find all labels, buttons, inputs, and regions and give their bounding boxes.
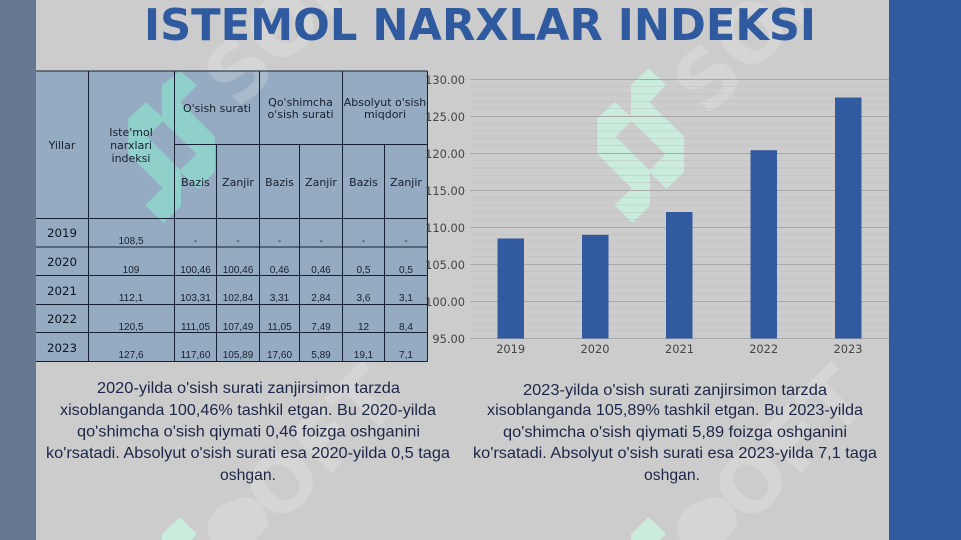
x axis labels [496, 342, 862, 356]
table row 2022: 111,05 [181, 322, 210, 333]
y axis labels: 130.00 [425, 73, 465, 87]
table row 2019: - [236, 236, 240, 247]
table row 2022 [47, 312, 413, 333]
table row 2022: 12 [358, 322, 369, 333]
table header: narxlari [110, 139, 152, 152]
table row 2022: 2022 [47, 312, 77, 326]
table row 2023: 2023 [47, 341, 77, 355]
logo: lower left [162, 517, 197, 540]
table header: Absolyut o'sish [344, 96, 426, 109]
table row 2020: 0,5 [399, 265, 413, 276]
y axis labels: 95.00 [432, 332, 465, 346]
table header: Yillar [48, 139, 76, 152]
text block: 2020 commentary: oshgan. [220, 467, 276, 484]
table header: miqdori [364, 108, 406, 121]
table row 2021: 2,84 [311, 293, 331, 304]
table row 2021: 3,6 [357, 293, 371, 304]
text block: 2020 commentary: 2020-yilda o'sish surati zanjirsimon tarzda [97, 380, 400, 397]
table row 2019: - [362, 236, 365, 247]
table row 2021: 2021 [47, 284, 77, 298]
table row 2020: 100,46 [223, 265, 254, 276]
table row 2023 [47, 341, 413, 361]
table row 2021: 3,31 [270, 293, 290, 304]
x axis labels: 2023 [834, 342, 862, 356]
watermark: lower left: OFT [226, 349, 417, 540]
y axis labels: 105.00 [425, 258, 465, 272]
table header: Zanjir [305, 176, 337, 189]
bar chart [425, 73, 889, 356]
table row 2023: 117,60 [181, 350, 211, 361]
table row 2022: 11,05 [267, 322, 292, 333]
bars [498, 98, 862, 338]
x axis labels: 2022 [749, 342, 778, 356]
y axis labels: 115.00 [425, 184, 465, 198]
text block: 2023 commentary [473, 382, 877, 484]
y axis labels [425, 73, 465, 346]
table row 2020: 109 [123, 265, 140, 276]
table row 2022: 7,49 [311, 322, 331, 333]
text block: 2023 commentary: qo'shimcha o'sish qiymati 5,89 foizga oshganini [503, 424, 847, 441]
table row 2023: 7,1 [399, 350, 413, 361]
table row 2023: 17,60 [267, 350, 292, 361]
table header: Iste'mol [109, 126, 153, 139]
watermark: lower right: OFT [695, 349, 886, 540]
table row 2019: 108,5 [118, 236, 144, 247]
table row 2020 [47, 255, 413, 276]
table background [36, 71, 428, 362]
text block: 2023 commentary: oshgan. [644, 467, 700, 484]
table row 2021: 103,31 [180, 293, 211, 304]
table header: Bazis [265, 176, 294, 189]
table row 2020: 0,5 [357, 265, 371, 276]
table row 2020: 2020 [47, 255, 77, 269]
table header: indeksi [112, 152, 150, 165]
table header: O'sish surati [183, 102, 251, 115]
table row 2019 [47, 226, 408, 247]
table row 2022: 8,4 [399, 322, 413, 333]
table row 2023: 127,6 [118, 350, 144, 361]
left side band [0, 0, 36, 540]
table row 2021: 102,84 [223, 293, 254, 304]
text block: 2023 commentary: xisoblanganda 105,89% tashkil etgan. Bu 2023-yilda [487, 402, 863, 419]
table row 2022: 107,49 [223, 322, 254, 333]
logo: lower right [631, 517, 666, 540]
text block: 2020 commentary: ko'rsatadi. Absolyut o'sish surati esa 2020-yilda 0,5 taga [46, 445, 450, 462]
table row 2023: 105,89 [223, 350, 254, 361]
table header: Qo'shimcha [268, 96, 333, 109]
table header: Bazis [181, 176, 210, 189]
table row 2020: 100,46 [180, 265, 211, 276]
table row 2021: 3,1 [399, 293, 413, 304]
table header: Bazis [349, 176, 378, 189]
y axis labels: 100.00 [425, 295, 465, 309]
x axis labels: 2021 [665, 342, 694, 356]
title: ISTEMOL NARXLAR INDEKSI [144, 0, 816, 51]
text block: 2020 commentary: qo'shimcha o'sish qiymati 0,46 foizga oshganini [77, 424, 420, 440]
table header: Zanjir [390, 176, 422, 189]
table header [48, 96, 426, 189]
logo: upper right [597, 68, 684, 223]
text block: 2020 commentary: xisoblanganda 100,46% tashkil etgan. Bu 2020-yilda [60, 402, 436, 419]
table row 2019: - [278, 236, 281, 247]
table row 2022: 120,5 [118, 322, 144, 333]
table row 2023: 5,89 [311, 350, 331, 361]
table row 2020: 0,46 [311, 265, 331, 276]
table row 2019: - [404, 236, 408, 247]
logo: upper left over table [128, 71, 215, 223]
table row 2021 [47, 284, 413, 304]
table row 2023: 19,1 [354, 350, 374, 361]
table header: Zanjir [222, 176, 254, 189]
table [36, 71, 428, 362]
text block: 2020 commentary [46, 380, 450, 484]
table row 2021: 112,1 [119, 293, 144, 304]
y axis labels: 110.00 [425, 221, 465, 235]
right side band [889, 0, 961, 540]
table row 2020: 0,46 [270, 265, 290, 276]
text block: 2023 commentary: ko'rsatadi. Absolyut o'sish surati esa 2023-yilda 7,1 taga [473, 445, 877, 462]
x axis labels: 2020 [580, 342, 610, 356]
table header: o'sish surati [267, 108, 334, 121]
text block: 2023 commentary: 2023-yilda o'sish surati zanjirsimon tarzda [523, 382, 827, 399]
y axis labels: 120.00 [425, 147, 465, 161]
y axis labels: 125.00 [425, 110, 465, 124]
table row 2019: - [319, 236, 323, 247]
table row 2019: - [194, 236, 197, 247]
table row 2019: 2019 [47, 226, 77, 240]
x axis labels: 2019 [496, 342, 525, 356]
